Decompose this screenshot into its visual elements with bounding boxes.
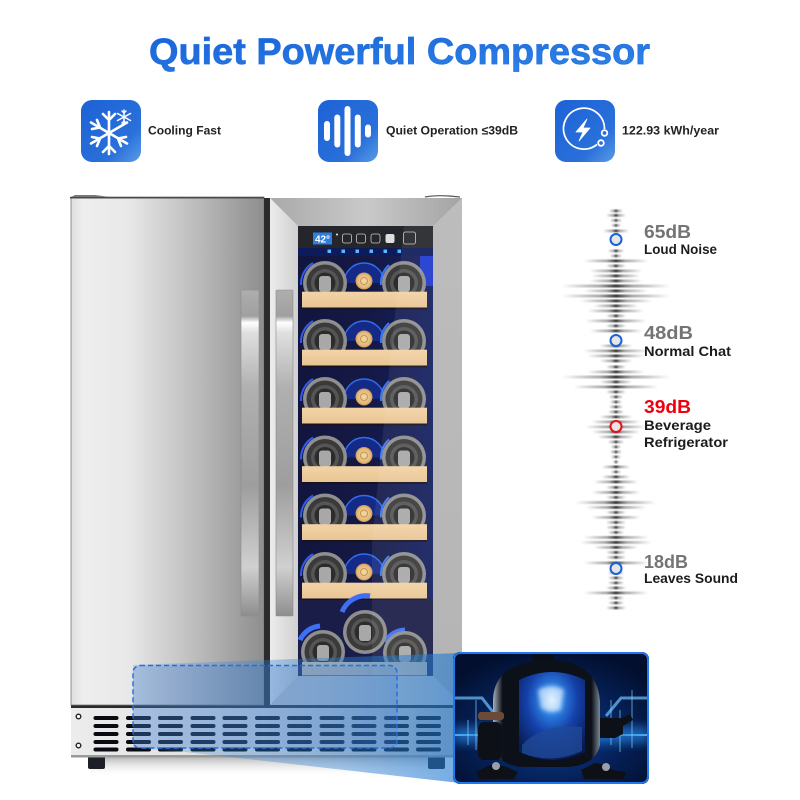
shelf row 4 xyxy=(301,436,427,484)
compressor body xyxy=(493,654,600,767)
shelf row 5 xyxy=(301,494,427,542)
left handle xyxy=(241,290,259,616)
label: 39dB beverage refrigerator: Beverage xyxy=(644,417,711,433)
label: 18dB leaves sound: Leaves Sound xyxy=(644,570,738,586)
marker 48dB xyxy=(610,335,622,346)
label: 39dB beverage refrigerator xyxy=(644,397,729,450)
foot right xyxy=(428,756,445,769)
label: 39dB beverage refrigerator: Refrigerator xyxy=(644,434,729,450)
feature: cooling fast xyxy=(81,100,221,162)
label: 18dB leaves sound: 18dB xyxy=(644,552,688,572)
compressor close-up xyxy=(453,652,649,784)
label: 39dB beverage refrigerator: 39dB xyxy=(644,397,691,417)
label: 48dB normal chat: 48dB xyxy=(644,323,693,343)
highlight beam to compressor xyxy=(133,653,460,783)
title: Quiet Powerful Compressor xyxy=(149,31,650,72)
waveform xyxy=(562,210,670,609)
foot left xyxy=(88,756,105,769)
dashed compressor location xyxy=(133,666,397,748)
label: 48dB normal chat xyxy=(644,323,731,359)
feature: quiet operation xyxy=(318,100,518,162)
label: 65dB loud noise: 65dB xyxy=(644,222,691,242)
control panel: 42° xyxy=(315,234,330,246)
right handle xyxy=(276,290,293,616)
glow lines xyxy=(453,690,649,752)
refrigerator xyxy=(70,195,462,777)
floor shadow xyxy=(90,757,435,777)
marker 18dB xyxy=(610,563,622,574)
marker 65dB xyxy=(610,234,622,245)
shelf row 6 xyxy=(301,552,427,600)
shelf row 2 xyxy=(301,319,427,368)
base grille xyxy=(71,705,460,758)
label: 18dB leaves sound xyxy=(644,552,738,586)
noise level scale xyxy=(562,210,738,609)
marker 39dB xyxy=(610,421,622,432)
lower bottles xyxy=(298,596,433,676)
left door xyxy=(70,195,264,705)
right door frame xyxy=(270,196,462,705)
label: cooling fast: Cooling Fast xyxy=(148,124,221,138)
door gap xyxy=(264,198,270,706)
label: 65dB loud noise xyxy=(644,222,717,257)
label: energy use: 122.93 kWh/year xyxy=(622,124,719,138)
glass with wine racks xyxy=(298,226,433,676)
feature: energy use xyxy=(555,100,719,162)
icon: energy bolt xyxy=(555,100,615,162)
compressor fittings xyxy=(476,712,633,779)
control panel xyxy=(298,226,433,256)
label: quiet operation: Quiet Operation ≤39dB xyxy=(386,124,518,138)
icon: snowflake xyxy=(81,100,141,162)
label: 65dB loud noise: Loud Noise xyxy=(644,241,717,257)
shelf row 1 xyxy=(301,261,427,310)
led lights xyxy=(328,250,401,253)
label: 48dB normal chat: Normal Chat xyxy=(644,343,731,359)
icon: sound wave xyxy=(318,100,378,162)
infographic canvas xyxy=(70,36,738,784)
shelf row 3 xyxy=(301,377,427,426)
